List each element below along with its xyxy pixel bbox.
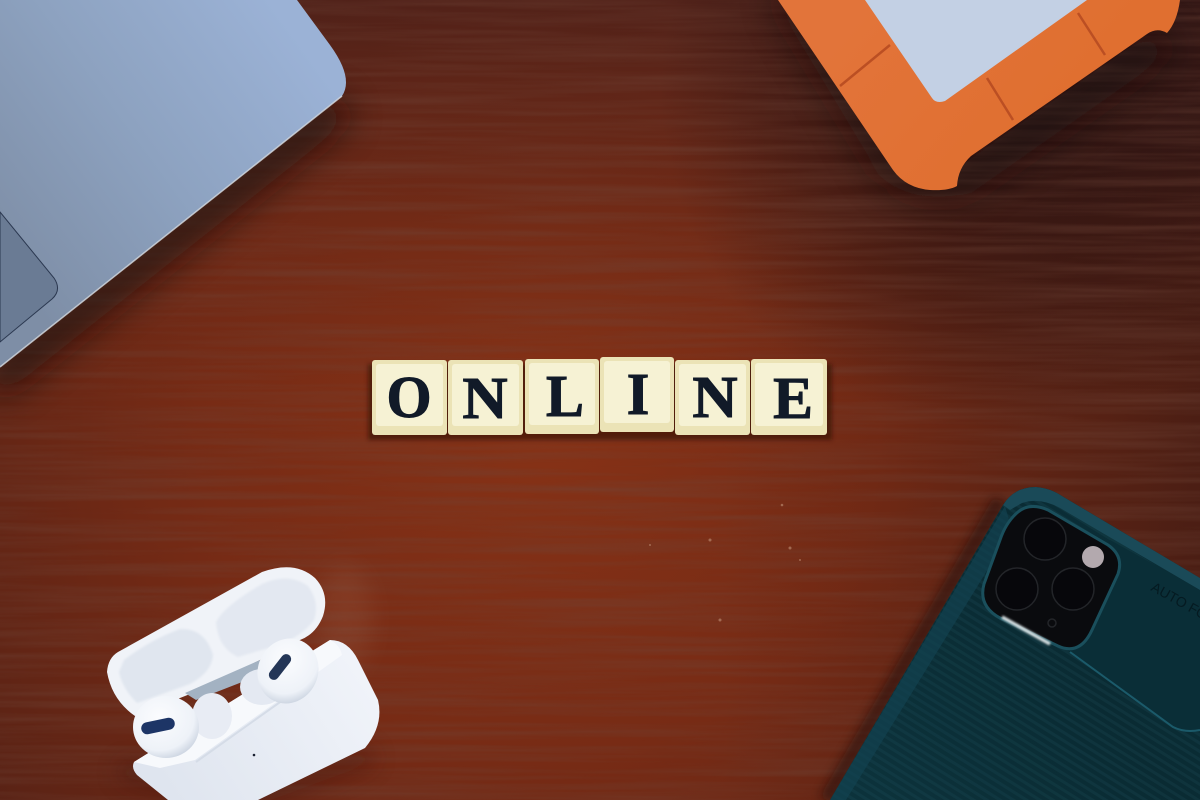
tile I <box>600 357 674 432</box>
grooves <box>840 13 1105 120</box>
camera module <box>983 506 1120 649</box>
lenses <box>996 518 1094 610</box>
left recess <box>119 629 213 703</box>
tile I: I <box>627 361 649 427</box>
case body <box>133 640 379 800</box>
tile E <box>751 359 827 435</box>
tile N <box>448 360 523 435</box>
tile O <box>372 360 447 435</box>
left earbud <box>133 693 232 758</box>
AirPods Pro case <box>107 567 379 800</box>
tile E: E <box>773 365 813 431</box>
right recess <box>216 578 316 657</box>
tile L <box>525 359 599 434</box>
gap between lid and case <box>185 660 268 700</box>
tile O: O <box>386 364 432 430</box>
orange rugged drive <box>778 0 1180 190</box>
flash <box>1082 546 1104 568</box>
tile N <box>675 360 750 435</box>
upper plate of case <box>1128 550 1200 604</box>
drive face <box>865 0 1087 102</box>
trackpad <box>0 212 58 342</box>
word tiles: ONLINE <box>368 357 832 440</box>
microphone <box>1048 619 1056 627</box>
open lid <box>107 567 325 716</box>
tile N: N <box>692 366 738 431</box>
tile L: L <box>546 363 584 429</box>
phone in teal case <box>820 480 1200 800</box>
tile N: N <box>462 367 508 432</box>
laptop corner <box>0 0 346 384</box>
right earbud <box>240 628 329 714</box>
